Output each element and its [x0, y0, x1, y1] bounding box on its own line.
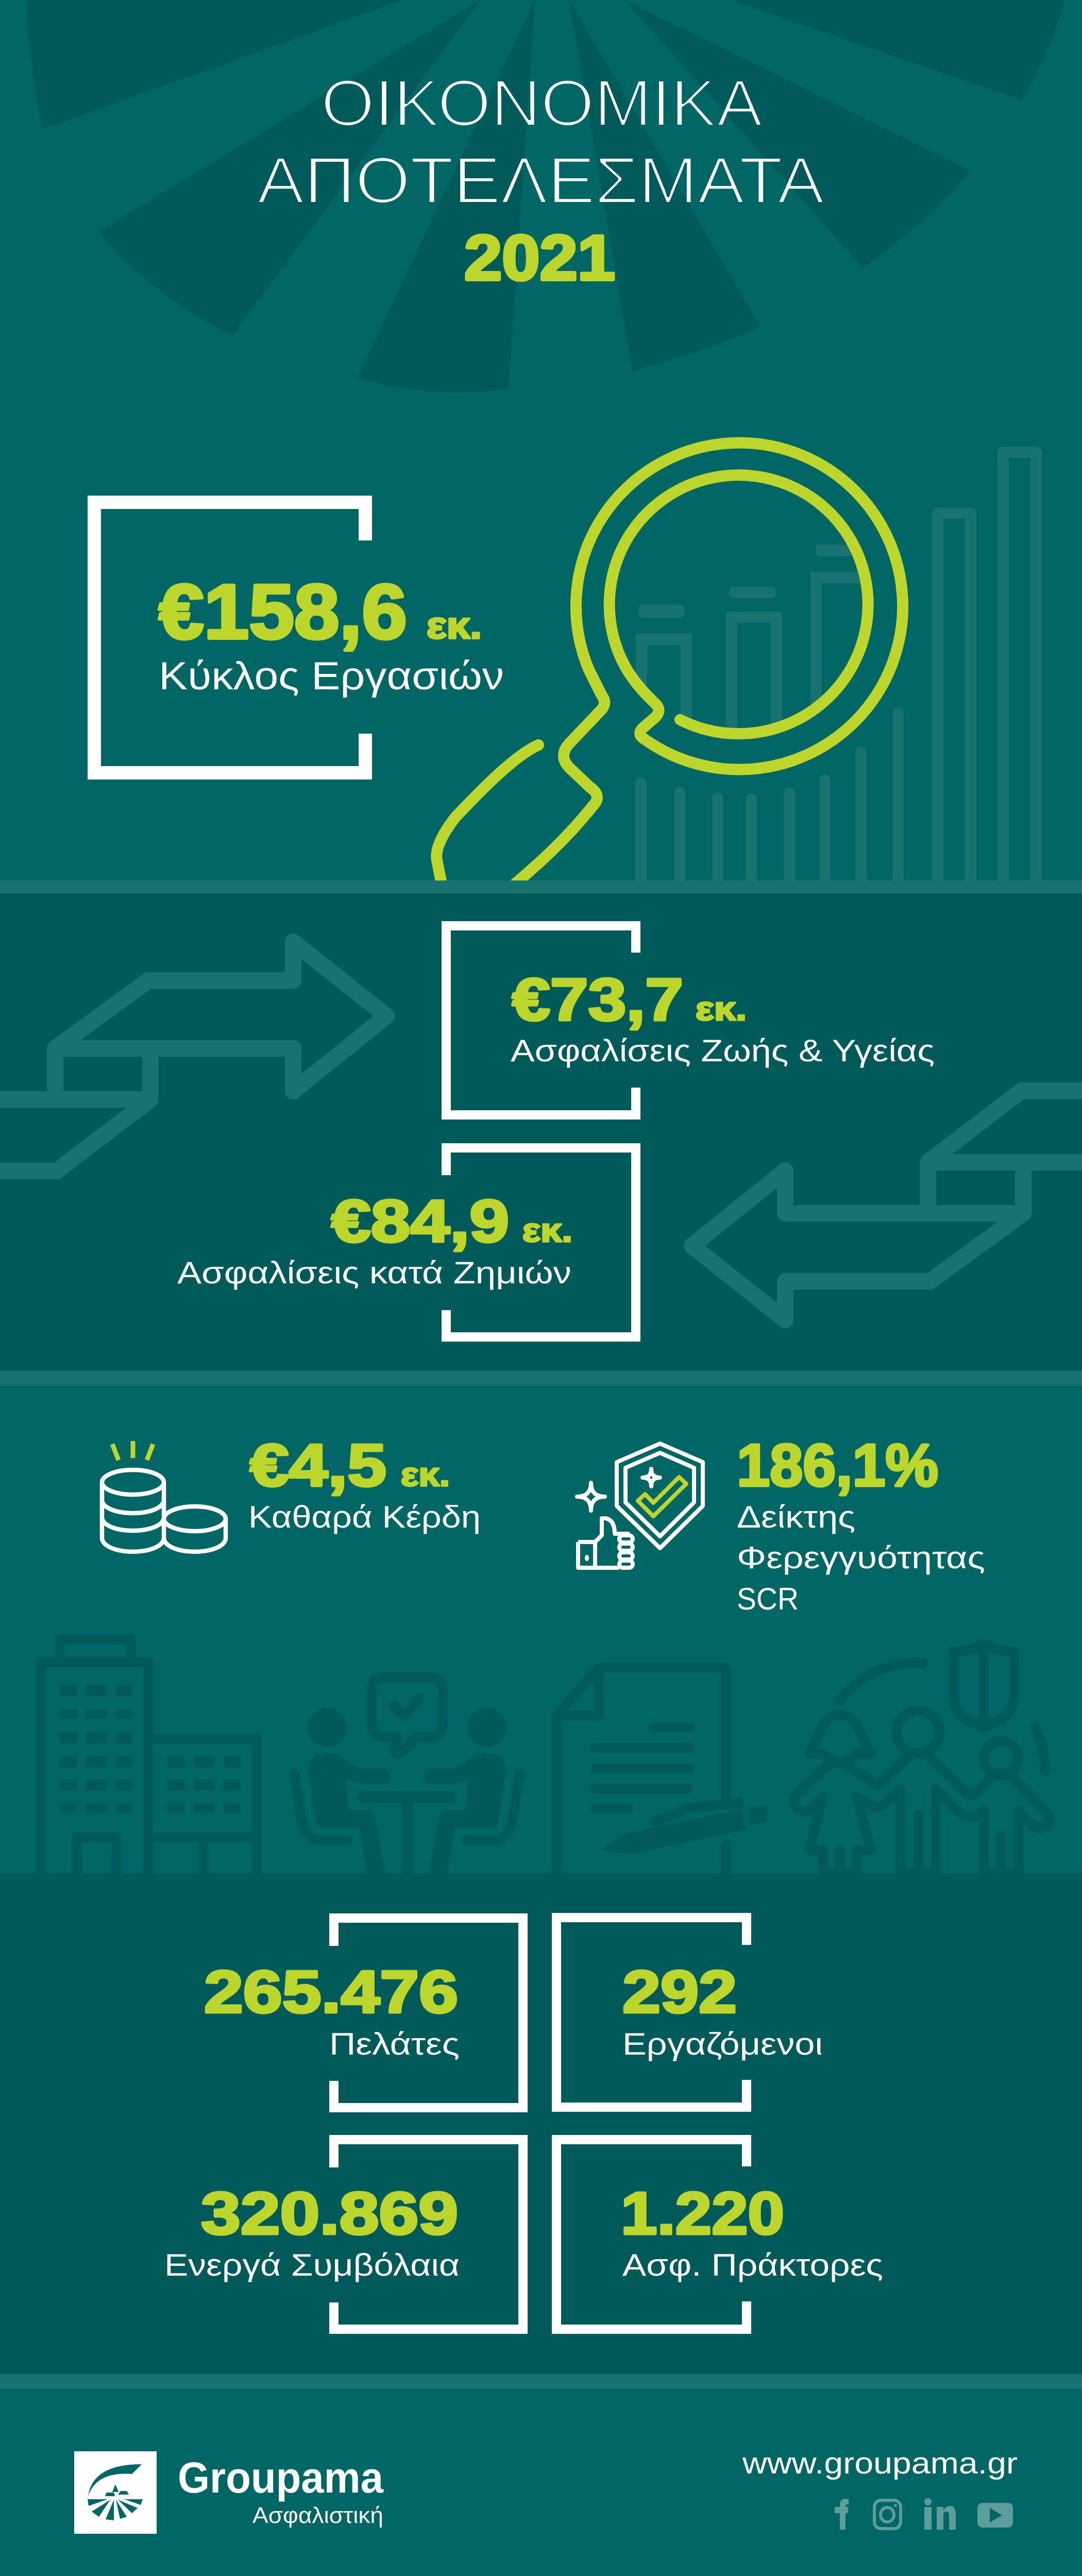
background: business meeting: [295, 1677, 519, 1875]
background: sunburst wedges: [26, 0, 1064, 392]
solvency label: [737, 1500, 985, 1616]
panel: life and health bracket: [446, 926, 636, 1115]
background: office buildings: [41, 1639, 257, 1875]
stat: employees: [556, 1918, 823, 2107]
stat: active policies: 320.869: [201, 2180, 458, 2247]
stat: customers: [204, 1918, 523, 2108]
icon: shield with check and thumbs up: [577, 1444, 703, 1568]
arrow: right pointing: [0, 942, 386, 1171]
turnover value: €158,6: [159, 568, 407, 655]
turnover label: Κύκλος Εργασιών: [159, 654, 504, 698]
panel: turnover bracket: [94, 502, 365, 773]
title: ΟΙΚΟΝΟΜΙΚΑ: [321, 66, 763, 140]
band: divider 1: [0, 880, 1082, 893]
stat: agents: Ασφ. Πράκτορες: [622, 2248, 883, 2282]
property and casualty value: εκ.: [522, 1212, 572, 1249]
title: ΑΠΟΤΕΛΕΣΜΑΤΑ: [257, 144, 825, 217]
icon: magnifying glass: [436, 443, 903, 884]
solvency label: Φερεγγυότητας: [737, 1540, 985, 1575]
life and health value: €73,7: [512, 966, 683, 1033]
stat: agents: 1.220: [621, 2180, 784, 2247]
logo: Groupama: Groupama: [178, 2453, 384, 2502]
social icons: [835, 2498, 1013, 2530]
stat: customers: 265.476: [204, 1958, 458, 2025]
life and health value: [512, 966, 747, 1033]
stat: employees: 292: [622, 1958, 737, 2025]
stat: active policies: Ενεργά Συμβόλαια: [164, 2248, 460, 2282]
band: divider 3: [0, 2374, 1082, 2389]
stat: agents: [556, 2140, 883, 2329]
net profit value: €4,5: [250, 1432, 386, 1499]
logo: Groupama: [74, 2451, 384, 2534]
solvency label: SCR: [737, 1582, 799, 1616]
title: 2021: [464, 223, 615, 294]
website url: www.groupama.gr: [742, 2447, 1018, 2480]
property and casualty value: [331, 1188, 572, 1255]
property and casualty label: Ασφαλίσεις κατά Ζημιών: [177, 1256, 571, 1290]
stat: customers: Πελάτες: [329, 2027, 460, 2061]
life and health label: Ασφαλίσεις Ζωής & Υγείας: [511, 1033, 935, 1068]
background: bar chart: [638, 452, 1036, 886]
life and health value: εκ.: [696, 990, 747, 1027]
background: contract document: [556, 1668, 767, 1875]
icon: coins: [102, 1441, 226, 1552]
panel: stats background: [0, 1873, 1082, 2374]
logo: Groupama: Ασφαλιστική: [252, 2503, 383, 2528]
arrow: left pointing: [692, 1091, 1082, 1320]
panel: property and casualty bracket: [446, 1148, 636, 1337]
background: family under shield: [794, 1643, 1050, 1875]
title: [257, 66, 825, 294]
net profit value: εκ.: [401, 1456, 450, 1493]
net profit label: Καθαρά Κέρδη: [248, 1500, 481, 1534]
panel: insurance lines background: [0, 893, 1082, 1371]
property and casualty value: €84,9: [331, 1188, 509, 1255]
stat: employees: Εργαζόμενοι: [622, 2027, 823, 2061]
turnover value: εκ.: [427, 605, 482, 647]
stat: active policies: [164, 2140, 523, 2329]
net profit value: [250, 1432, 450, 1499]
solvency value: 186,1%: [737, 1432, 938, 1499]
band: divider 2: [0, 1371, 1082, 1386]
solvency label: Δείκτης: [737, 1500, 855, 1534]
